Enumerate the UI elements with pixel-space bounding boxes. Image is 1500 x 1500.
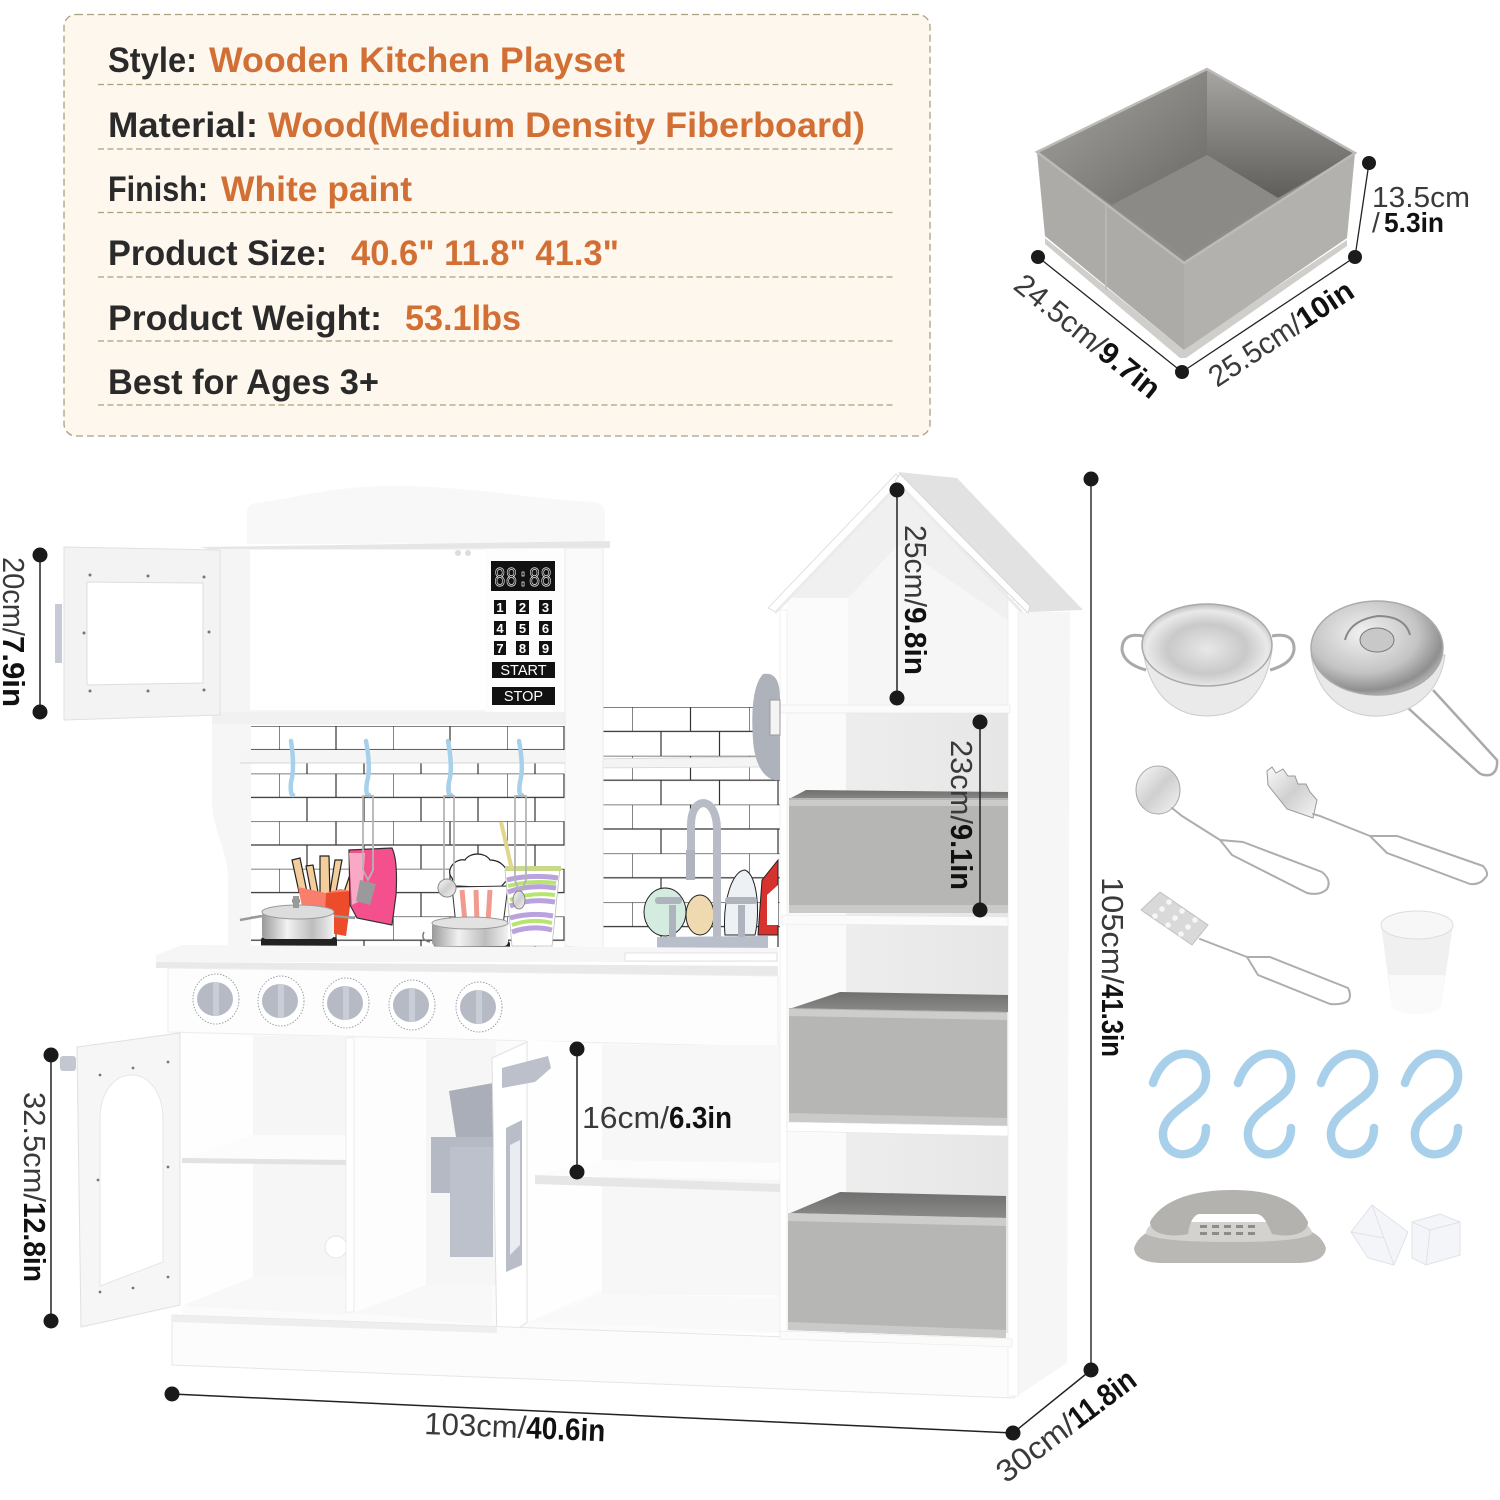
backsplash right: [603, 707, 780, 947]
label: bin depth: 24.5cm/: [1008, 268, 1113, 362]
fruit doodles: [644, 860, 778, 936]
accessory: pasta spoon: [1267, 767, 1487, 884]
storage drawer 3: [788, 1192, 1006, 1338]
doodle: striped cup: [501, 822, 561, 946]
spec: product weight: [108, 299, 521, 338]
pot on right burner: [423, 917, 510, 954]
pot on left burner: [240, 896, 355, 951]
label: shelf height: 9.1in: [944, 824, 979, 890]
spec: material: Material:: [108, 106, 258, 145]
microwave keypad: 2: [519, 600, 526, 615]
microwave keypad: 8: [519, 641, 526, 656]
top crown: [247, 486, 605, 544]
microwave keypad: 1: [496, 600, 504, 615]
label: lower shelf height: [582, 1100, 732, 1135]
accessory: S hooks: [1153, 1054, 1458, 1154]
base plinth: [172, 1315, 1014, 1398]
lower left door: [60, 1033, 180, 1327]
microwave display: [491, 561, 555, 595]
doodle: fries box: [292, 856, 364, 936]
spec: style: Style:: [108, 41, 197, 80]
label: overall height: [1095, 877, 1130, 1057]
label: cabinet door height: 32.5cm/: [17, 1092, 52, 1202]
spec: product size: [108, 234, 619, 273]
label: lower shelf height: 16cm/: [582, 1100, 669, 1135]
stove hole: [325, 1236, 347, 1258]
small door: [492, 1042, 551, 1345]
microwave display: 88:88: [494, 565, 552, 595]
tower side panel: [1014, 612, 1070, 1398]
label: door height: [0, 557, 31, 707]
label: overall height: 41.3in: [1095, 984, 1130, 1057]
label: depth: 30cm/: [989, 1407, 1082, 1490]
label: roof height: 25cm/: [898, 525, 933, 607]
right pillar: [565, 548, 603, 950]
label: bin width: 10in: [1290, 274, 1360, 336]
spec: material: Wood(Medium Density Fiberboard): [268, 106, 865, 145]
backsplash left: [251, 726, 565, 948]
spec: product weight: 53.1lbs: [405, 299, 521, 338]
lower cabinet backdrop: [182, 1033, 780, 1333]
accessory: spatula: [1141, 892, 1350, 1004]
shelf 3: [787, 1122, 1008, 1136]
accessory: ladle: [1136, 766, 1329, 894]
storage drawer 1: [789, 790, 1008, 913]
label: depth: [989, 1362, 1143, 1490]
accessory: ice cubes: [1351, 1205, 1460, 1265]
dimension lines: [32, 472, 1098, 1440]
accessory: measuring cup: [1381, 911, 1453, 1014]
spec: age: Best for Ages 3+: [108, 363, 379, 402]
label: cabinet door height: [17, 1092, 52, 1282]
spec: finish: [108, 170, 412, 209]
small wall shelf: [584, 757, 765, 768]
tower frame: [780, 600, 1018, 1396]
doodle: popcorn: [450, 854, 508, 925]
top shelf: [200, 541, 610, 550]
storage drawer 2: [789, 992, 1008, 1127]
accessory: lidded pot: [1311, 601, 1497, 775]
bin outer walls: [1037, 152, 1184, 350]
oven knobs: [193, 974, 502, 1032]
control panel: [168, 968, 778, 1047]
microwave keypad: 6: [542, 621, 549, 636]
kitchen playset: [55, 472, 1083, 1398]
tower gable wall: [787, 480, 1008, 706]
label: width: 103cm/: [424, 1406, 527, 1445]
cabinet floor: [182, 1277, 347, 1315]
wavy side panel: [212, 724, 251, 948]
label: bin depth: [1008, 268, 1167, 405]
label: width: 40.6in: [526, 1410, 606, 1448]
spec: product size: Product Size:: [108, 234, 327, 273]
microwave keypad: [492, 600, 555, 705]
microwave keypad: 5: [519, 621, 526, 636]
divider: [426, 1040, 496, 1285]
microwave keypad: 7: [496, 641, 504, 656]
upper door: [55, 547, 220, 720]
label: bin width: [1203, 274, 1360, 394]
label: bin depth: 9.7in: [1092, 336, 1167, 405]
label: roof height: [898, 525, 933, 675]
microwave body: [212, 549, 603, 725]
left shelf: [182, 1135, 347, 1160]
label: lower shelf height: 6.3in: [669, 1100, 732, 1135]
label: width: [424, 1406, 606, 1448]
roof front edges: [768, 474, 1030, 613]
bin interior: [1037, 69, 1355, 263]
microwave keypad: STOP: [504, 689, 543, 705]
label: bin height: 13.5cm: [1372, 182, 1470, 214]
microwave keypad: 3: [542, 600, 549, 615]
panel: product specifications: [64, 14, 930, 436]
label: bin height: /: [1372, 207, 1380, 238]
tap and sink: [644, 803, 778, 952]
label: shelf height: [944, 740, 979, 890]
label: shelf height: 23cm/: [944, 740, 979, 824]
label: depth: 11.8in: [1061, 1362, 1143, 1435]
label: bin height: 5.3in: [1384, 207, 1444, 238]
hanging hooks and utensils: [291, 741, 526, 909]
spec: style: Wooden Kitchen Playset: [209, 41, 625, 80]
phone on tower side: [752, 674, 780, 780]
microwave keypad: START: [500, 663, 547, 679]
label: overall height: 105cm/: [1095, 877, 1130, 984]
microwave keypad: 4: [496, 621, 504, 636]
shelf 2: [782, 915, 1008, 926]
spec: product weight: Product Weight:: [108, 299, 382, 338]
label: bin width: 25.5cm/: [1203, 308, 1309, 394]
accessory: frying pan with handles: [1122, 604, 1294, 716]
spec: product size: 40.6" 11.8" 41.3": [351, 234, 619, 273]
accessory: toy telephone: [1134, 1190, 1326, 1263]
tower roof back: [898, 472, 1083, 612]
right compartment: [602, 1045, 780, 1295]
label: bin height: [1372, 182, 1470, 238]
label: roof height: 9.8in: [898, 607, 933, 675]
lower cabinet interior: [182, 1033, 780, 1345]
bin base: [1045, 238, 1347, 358]
microwave keypad: 9: [542, 641, 549, 656]
spec: finish: Finish:: [108, 170, 208, 209]
countertop: [156, 945, 778, 976]
label: cabinet door height: 12.8in: [17, 1202, 52, 1282]
doodle: pink soda pack: [349, 848, 396, 925]
spec: finish: White paint: [221, 170, 412, 209]
hanging rail: [240, 750, 565, 763]
tower compartments back: [787, 713, 1008, 1333]
bin dimension lines: [1031, 156, 1376, 379]
storage bin with dimensions: [1008, 69, 1470, 405]
dispenser: [431, 1083, 493, 1257]
